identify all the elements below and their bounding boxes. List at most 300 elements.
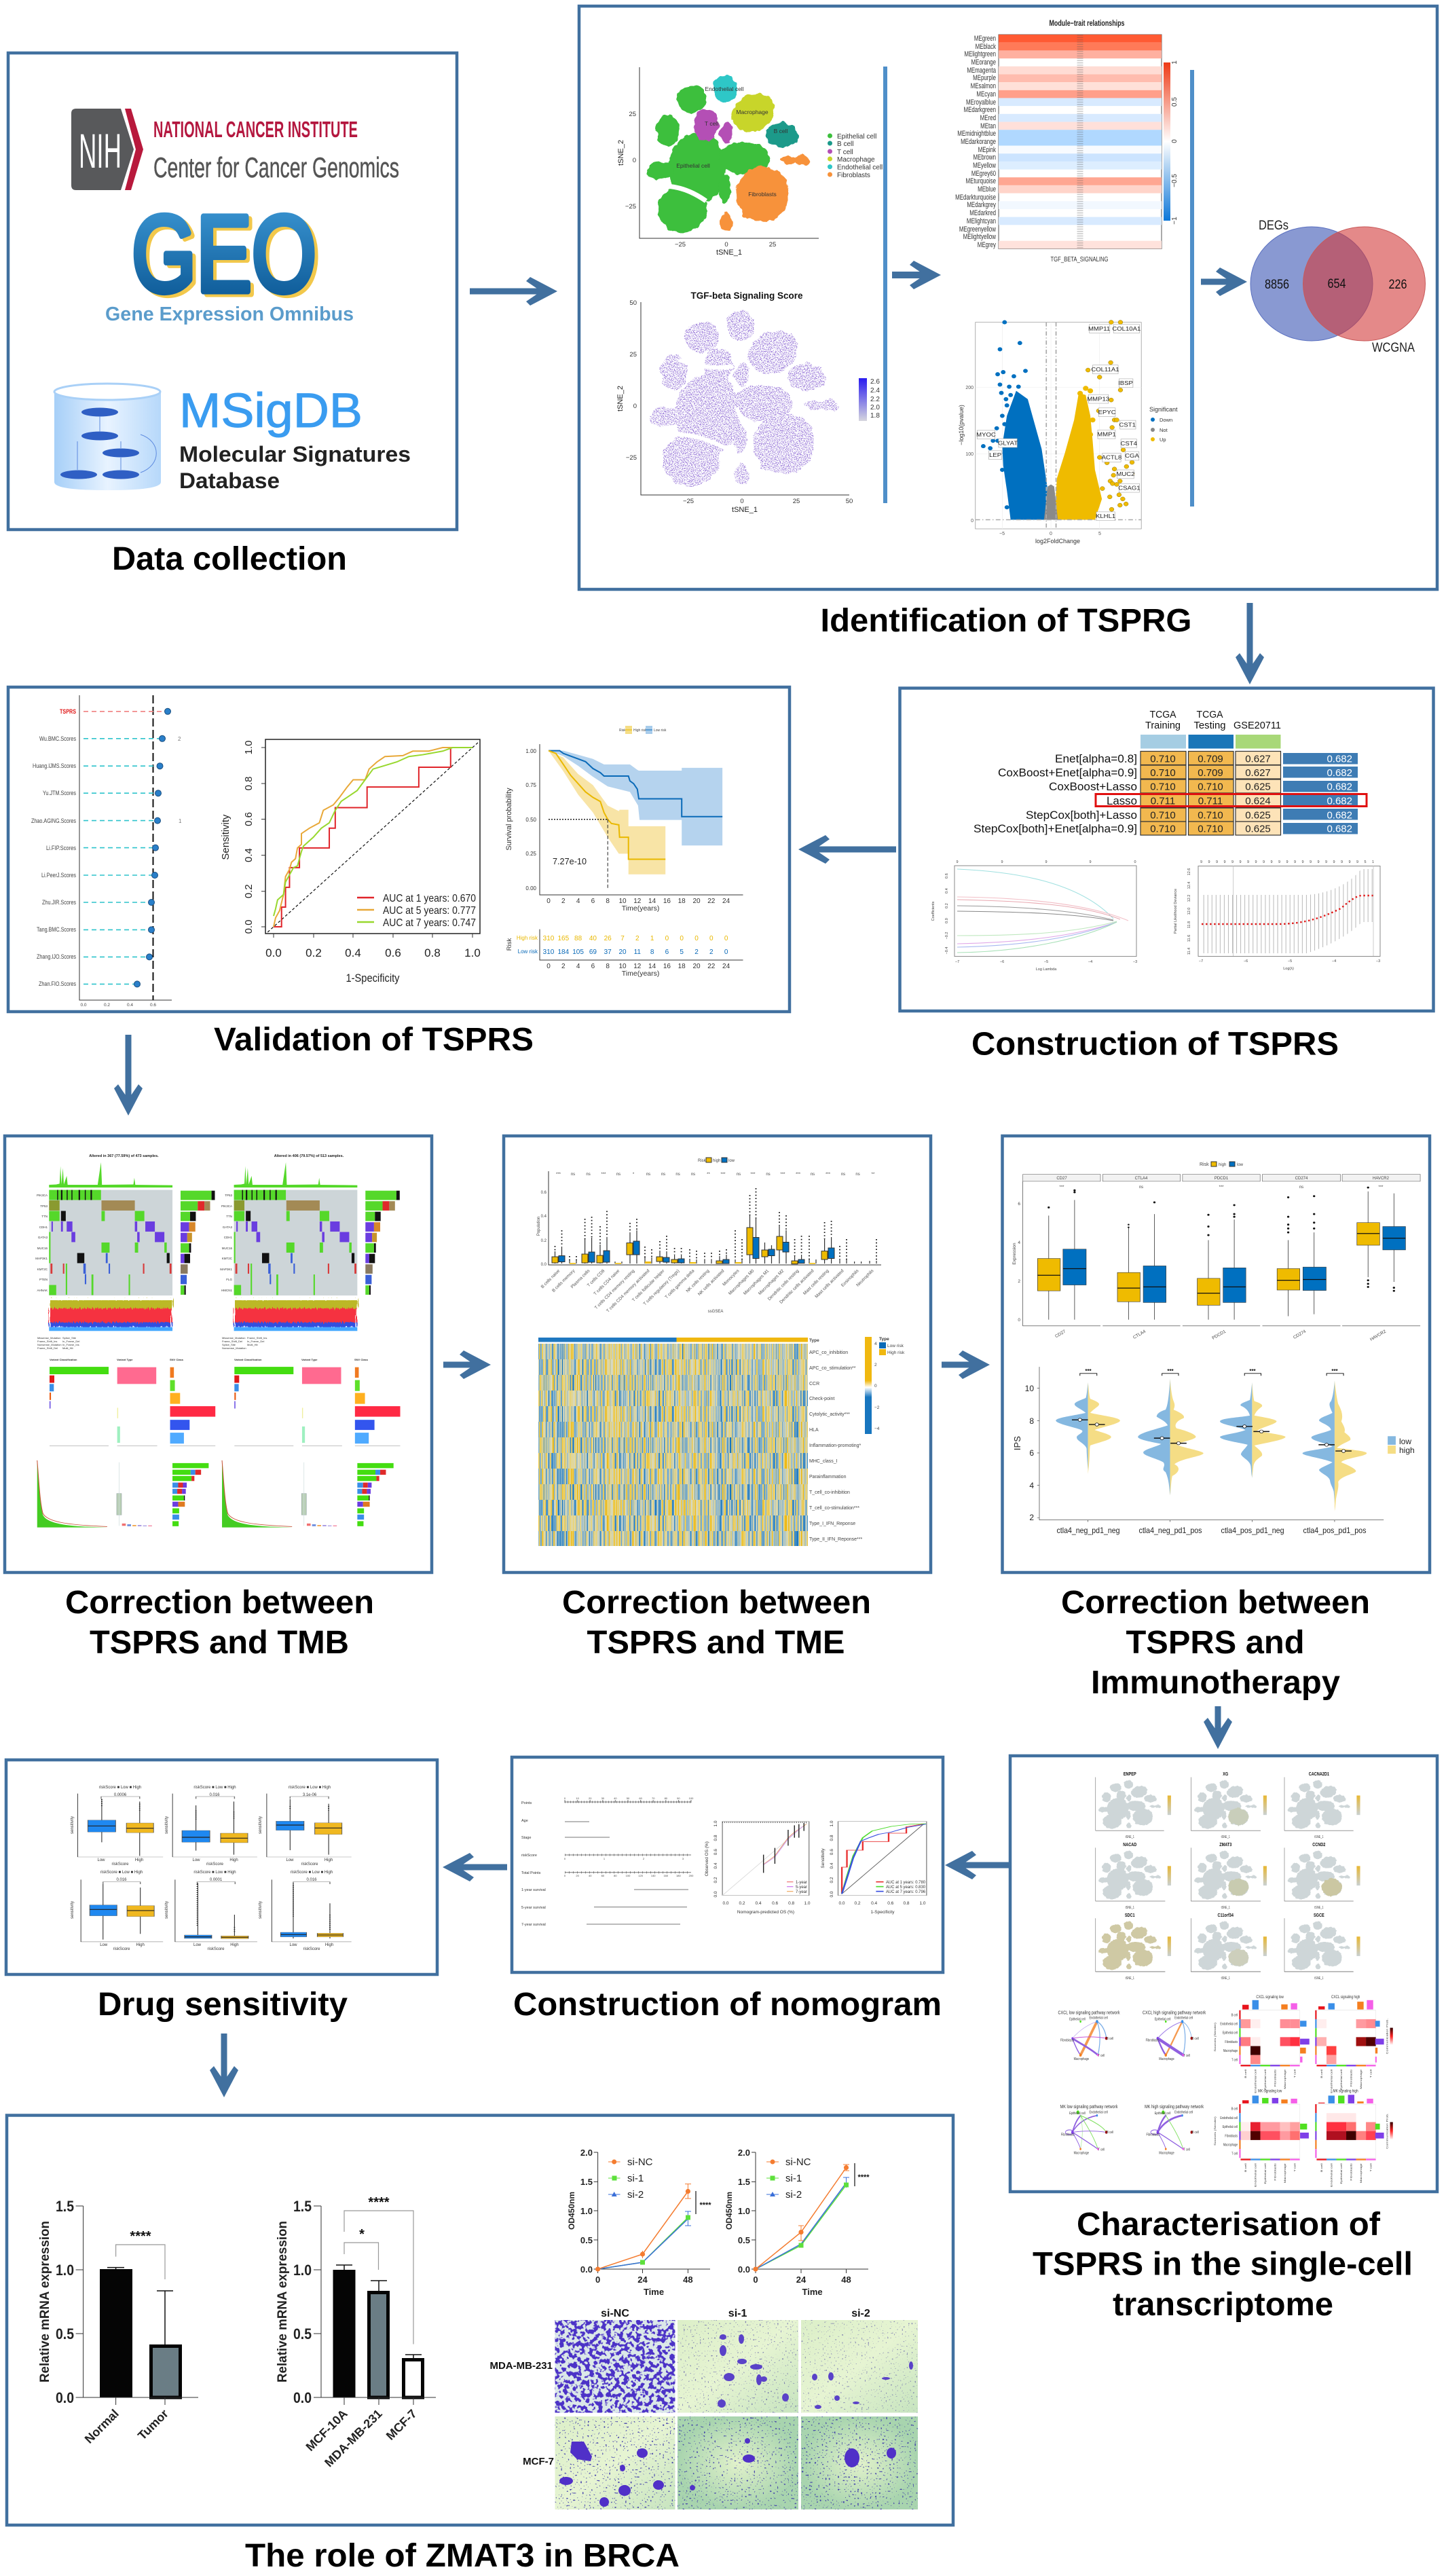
chart: communication probability heatmaps: Fibroblasts [1225,2134,1238,2137]
chart: immune cell boxplots: T cells CD4 naive [593,1268,621,1296]
chart: nomogram scales: 30 [601,1797,605,1800]
chart: nomogram scales: 5-year survival [521,1906,546,1910]
logo: GEO: Gene Expression Omnibus [105,303,354,325]
chart: nomogram ROC: 0.6 [887,1901,894,1906]
chart: CCK-8 line plot MCF-7: 2.0 [738,2148,750,2158]
table: model C-index: 0.710 [1198,823,1223,835]
chart: drug sensitivity boxplots: Low [286,1858,294,1862]
logo: GEO: GEO [132,193,316,314]
chart: immune cell boxplots: ns [855,1173,860,1177]
chart: C-index comparison lollipop: 0.0 [80,1003,87,1008]
heading: single-cell characterisation: TSPRS in the single-cell [1033,2246,1413,2283]
chart: nomogram scales: 40 [589,1874,592,1877]
chart: nomogram scales: 0 [564,1797,566,1800]
chart: lasso coefficient paths: 0 [1134,860,1136,864]
chart: gene expression tSNE grid: tSNE_1 [1221,1976,1230,1980]
chart: nomogram scales: Points [521,1801,532,1805]
chart: cell line mRNA bars: **** [368,2195,390,2210]
chart: Kaplan-Meier survival: 2 [561,963,566,970]
chart: immune cell boxplots: Dendritic cells resting [767,1268,800,1302]
chart: gene expression tSNE grid: tSNE_1 [1126,1835,1134,1839]
chart: nomogram scales: 10 [576,1797,580,1800]
chart: CXCL and MK communication networks: MK high signaling pathway network [1145,2104,1204,2110]
chart: module-trait heatmap [955,20,1179,263]
chart: immune checkpoint boxplots: 0 [1018,1318,1020,1323]
chart: immune function heatmap: APC_co_inhibition [809,1350,848,1355]
chart: lasso coefficient paths: 9 [1089,860,1092,864]
arrow: immunotherapy to single-cell [1204,1706,1232,1749]
chart: Kaplan-Meier survival: 20 [618,949,627,956]
chart: lasso coefficient paths: −0.2 [945,932,949,939]
table: model C-index: StepCox[both]+Enet[alpha=0.9] [974,822,1137,835]
heading: correction immunotherapy: Correction between [1061,1584,1370,1621]
chart: nomogram ROC: 0.2 [830,1877,834,1883]
chart: cross-validation deviance: −4 [1332,959,1336,963]
chart: time-dependent ROC: AUC at 7 years: 0.747 [383,917,476,929]
chart: cross-validation deviance: −6 [1244,959,1248,963]
logo: MSigDB: Molecular Signatures [179,442,411,466]
chart: immune function heatmap: Type [879,1337,889,1342]
chart: module-trait heatmap: MEmidnightblue [957,130,996,138]
chart: tSNE cell types: 0 [633,157,636,164]
chart: TGF-beta signaling score [616,291,880,514]
chart: Kaplan-Meier survival: 16 [663,898,671,905]
chart: volcano plot: Significant [1149,406,1178,413]
chart: nomogram ROC: 1.0 [830,1820,834,1827]
chart: CCK-8 line plot MDA-MB-231: **** [699,2201,711,2209]
chart: gene expression tSNE grid: tSNE_1 [1314,1976,1324,1980]
chart: nomogram scales: 50 [627,1797,630,1800]
chart: nomogram ROC: 0.4 [871,1901,877,1906]
chart: tSNE cell types: Macrophage [736,109,768,115]
chart: CXCL and MK communication networks: Macrophage [1159,2057,1174,2061]
chart: CXCL and MK communication networks: Macrophage [1074,2057,1089,2061]
chart: immune cell boxplots: 0.2 [541,1239,547,1243]
chart: C-index comparison lollipop: Zhao.AGING.Scores [31,817,76,824]
table: model C-index: 0.682 [1327,809,1352,822]
chart: nomogram scales: Stage [521,1836,531,1840]
chart: immune cell boxplots: Monocytes [722,1268,741,1287]
chart: volcano plot: CST1 [1119,422,1136,428]
chart: drug sensitivity boxplots: sensitivity [259,1816,263,1834]
chart: nomogram scales: 0 [564,1874,566,1877]
chart: immune checkpoint boxplots: HAVCR2 [1373,1177,1390,1181]
chart: immune function heatmap: Low risk [887,1344,904,1348]
chart: CCK-8 line plot MCF-7: 24 [796,2275,807,2285]
chart: communication probability heatmaps: Endothelial cell [1254,2163,1257,2187]
chart: IPS violin plots: *** [1249,1368,1257,1374]
chart: cell line mRNA bars: 1.5 [293,2198,312,2215]
heading: correction TMB: Correction between [65,1584,374,1621]
panel: role of ZMAT3 [7,2116,953,2525]
chart: nomogram scales: 7-year survival [521,1923,546,1927]
figure: transwell micrographs [489,2308,918,2509]
chart: nomogram ROC: 0.0 [838,1901,845,1906]
chart: tSNE cell types: −25 [675,241,686,249]
panel: identification of TSPRG [579,6,1437,589]
chart: module-trait heatmap: MEdarkgreen [963,106,996,114]
chart: oncoplots, mutation summaries and waterfall plots: Altered in 367 (77.59%) of 473 samples. [89,1154,159,1158]
chart: time-dependent ROC: 1.0 [464,946,481,959]
chart: TGF-beta signaling score: 50 [846,498,853,505]
chart: immune checkpoint boxplots: Expression [1012,1243,1017,1265]
chart: TGF-beta signaling score: 1.8 [870,412,880,420]
chart: lasso coefficient paths: −6 [1000,960,1004,964]
heading: correction immunotherapy: TSPRS and [1126,1624,1305,1661]
chart: immune cell boxplots: *** [556,1173,561,1177]
chart: communication probability heatmaps: MK signaling high [1333,2089,1358,2094]
chart: C-index comparison lollipop: 1 [179,818,182,824]
chart: immune cell boxplots: *** [796,1173,801,1177]
chart: CCK-8 line plot MCF-7: 0.0 [738,2264,750,2275]
chart: nomogram scales: 80 [614,1874,617,1877]
logo: NIH National Cancer Institute: Center for Cancer Genomics [153,151,399,183]
chart: Kaplan-Meier survival: 24 [722,898,730,905]
chart: immune function heatmap: 4 [874,1342,877,1346]
chart: volcano plot: −log10(pvalue) [958,405,965,445]
chart: immune cell boxplots: ns [766,1173,771,1177]
chart: CCK-8 line plot MDA-MB-231: si-1 [627,2173,644,2184]
chart: communication probability heatmaps: Sources (Sender) [1214,2116,1217,2146]
chart: immune cell boxplots: Mast cells activated [814,1268,845,1300]
chart: tSNE cell types [617,67,883,257]
chart: immune cell boxplots: ** [872,1173,875,1177]
chart: Kaplan-Meier survival: Low risk [654,729,667,733]
chart: nomogram ROC: AUC at 1 years: 0.780 [886,1881,926,1885]
chart: nomogram scales [521,1797,694,1927]
chart: nomogram scales: 70 [652,1797,655,1800]
chart: oncoplots, mutation summaries and waterfall plots: GATA3 [38,1236,48,1239]
chart: time-dependent ROC: 0.4 [243,848,255,862]
chart: oncoplots, mutation summaries and waterfall plots: Splice_Site [222,1343,236,1346]
chart: immune function heatmap: T_cell_co-stimulation*** [809,1506,859,1511]
chart: drug sensitivity boxplots: High [136,1943,145,1947]
chart: nomogram ROC: 0.6 [830,1849,834,1855]
chart: immune checkpoint boxplots: PDCD1 [1211,1329,1227,1341]
chart: module-trait heatmap: MEyellow [973,162,996,170]
chart: oncoplots, mutation summaries and waterfall plots: Multi_Hit [62,1346,73,1350]
chart: time-dependent ROC [220,739,481,985]
chart: nomogram scales: Age [521,1819,528,1823]
chart: gene expression tSNE grid: tSNE_1 [1126,1905,1134,1909]
chart: communication probability heatmaps: Communication Prob. [1386,2114,1389,2149]
chart: Kaplan-Meier survival: 0 [724,949,728,956]
panel: single-cell characterisation [1010,1756,1437,2192]
chart: volcano plot: CST4 [1121,440,1137,447]
table: model C-index: GSE20711 [1234,720,1281,731]
chart: drug sensitivity boxplots: riskScore [301,1862,318,1866]
chart: nomogram scales: 20 [589,1797,592,1800]
chart: module-trait heatmap: MElightyellow [963,233,996,241]
chart: immune cell boxplots: T cells follicular helper [631,1268,666,1303]
chart: immune checkpoint boxplots: HAVCR2 [1369,1329,1387,1342]
chart: oncoplots, mutation summaries and waterfall plots: Frame_Shift_Ins [247,1336,267,1340]
chart: immune function heatmap: Inflammation-promoting* [809,1443,861,1448]
heading: correction immunotherapy [1061,1584,1370,1701]
chart: IPS violin plots: *** [1167,1368,1174,1374]
chart: nomogram scales: 90 [677,1797,680,1800]
chart: immune function heatmap: MHC_class_I [809,1459,838,1464]
chart: communication probability heatmaps: B cell [1244,2069,1247,2078]
chart: Kaplan-Meier survival: 8 [606,963,610,970]
panel: drug sensitivity [6,1760,437,1974]
chart: gene expression tSNE grid: tSNE_1 [1221,1905,1230,1909]
chart: Kaplan-Meier survival: 12 [633,963,642,970]
chart: IPS violin plots: IPS [1012,1436,1022,1450]
chart: calibration curve: Nomogram-predicted OS (%) [737,1910,794,1915]
chart: calibration curve: 0.4 [755,1901,762,1906]
chart: time-dependent ROC: 0.2 [243,884,255,898]
chart: nomogram scales: 2 [643,1857,645,1860]
chart: lasso coefficient paths: −0.4 [945,947,949,954]
chart: CXCL and MK communication networks [1058,2010,1206,2156]
chart: immune checkpoint boxplots: *** [1219,1185,1224,1190]
chart: C-index comparison lollipop: Wu.BMC.Scores [39,735,76,742]
heading: drug sensitivity: Drug sensitivity [98,1986,348,2023]
heading: single-cell characterisation [1033,2206,1413,2323]
chart: drug sensitivity boxplots: Low [192,1858,200,1862]
chart: gene expression tSNE grid: tSNE_1 [1126,1976,1134,1980]
chart: drug sensitivity boxplots: High [135,1858,143,1862]
chart: nomogram ROC: AUC at 7 years: 0.796 [886,1890,926,1894]
chart: volcano plot: COL10A1 [1112,325,1141,332]
chart: drug sensitivity boxplots: riskScore [303,1947,320,1951]
chart: module-trait heatmap: −0.5 [1171,174,1179,187]
chart: Kaplan-Meier survival: 12 [633,898,642,905]
chart: communication probability heatmaps: CXCL signaling low [1256,1995,1284,2000]
chart: Kaplan-Meier survival: 0 [680,935,684,942]
chart: Kaplan-Meier survival: 4 [576,963,580,970]
chart: CXCL and MK communication networks: B cell [1192,2036,1199,2041]
chart: immune function heatmap: Cytolytic_activity*** [809,1412,850,1417]
chart: Kaplan-Meier survival: Survival probability [505,788,513,851]
chart: oncoplots, mutation summaries and waterfall plots: TTN [226,1215,232,1218]
chart: C-index comparison lollipop [31,695,182,1008]
table: model C-index: 0.711 [1198,796,1223,807]
chart: Kaplan-Meier survival: 6 [591,963,595,970]
chart: communication probability heatmaps: Epithelial cell [1340,2069,1343,2090]
chart: Kaplan-Meier survival: 0.00 [525,885,537,891]
chart: volcano plot: KLHL1 [1096,513,1115,519]
chart: CCK-8 line plot MCF-7: Time [802,2287,823,2297]
chart: nomogram ROC: 0.8 [903,1901,910,1906]
chart: cell line mRNA bars: MCF-10A [303,2407,350,2454]
chart: oncoplots, mutation summaries and waterfall plots: Variant Type [117,1358,133,1361]
chart: communication probability heatmaps: Epithelial cell [1264,2163,1267,2184]
chart: immune cell boxplots: *** [601,1173,606,1177]
table: model C-index: 0.627 [1245,767,1271,779]
chart: C-index comparison lollipop: 0.4 [127,1003,133,1008]
chart: CCK-8 line plot MDA-MB-231: OD450nm [567,2192,576,2230]
chart: communication probability heatmaps: T cell [1231,2152,1238,2156]
chart: immune cell boxplots: *** [780,1173,785,1177]
table: model C-index: Enet[alpha=0.8] [1055,752,1137,765]
chart: oncoplots, mutation summaries and waterfall plots: Missense_Mutation [37,1336,60,1340]
chart: gene expression tSNE grid: SGCE [1314,1913,1324,1918]
chart: Kaplan-Meier survival: 0 [546,898,551,905]
chart: immune cell boxplots: ** [707,1173,710,1177]
chart: nomogram ROC: 0.2 [854,1901,861,1906]
chart: tissue mRNA bars: 1.0 [56,2262,74,2279]
chart: Kaplan-Meier survival: 7.27e-10 [553,856,587,866]
chart: tissue mRNA bars [38,2198,198,2446]
chart: Venn diagram [1250,219,1426,355]
chart: cross-validation deviance: 12.6 [1187,868,1191,875]
chart: communication probability heatmaps: MK signaling low [1258,2089,1282,2094]
chart: nomogram ROC [821,1820,927,1915]
chart: cell line mRNA bars: 1.0 [293,2262,312,2279]
chart: tSNE cell types: T cell [705,120,718,127]
chart: tSNE cell types: tSNE_1 [716,249,742,257]
chart: drug sensitivity boxplots: riskScore ■ Low ■ High [291,1871,333,1875]
chart: immune cell boxplots: Eosinophils [840,1268,860,1288]
chart: drug sensitivity boxplots: riskScore ■ Low ■ High [99,1786,141,1790]
chart: immune function heatmap: Check-point [809,1397,834,1401]
chart: gene expression tSNE grid: C11orf34 [1218,1913,1234,1918]
chart: calibration curve: 1.0 [713,1820,718,1827]
chart: module-trait heatmap: MEblack [976,43,996,51]
chart: time-dependent ROC: 0.8 [424,946,441,959]
figure: transwell micrographs: MDA-MB-231 [489,2360,553,2372]
chart: cell line mRNA bars: 0.0 [293,2389,312,2406]
chart: cross-validation deviance: 12.4 [1187,882,1191,889]
chart: oncoplots, mutation summaries and waterfall plots: AHNAK [37,1289,48,1292]
chart: immune cell boxplots: low [728,1159,735,1163]
chart: IPS violin plots: ctla4_pos_pd1_neg [1221,1526,1284,1535]
chart: calibration curve: 0.0 [722,1901,729,1906]
heading: correction TME: TSPRS and TME [587,1624,845,1661]
chart: communication probability heatmaps: Fibroblasts [1274,2163,1276,2181]
chart: C-index comparison lollipop: Huang.IJMS.Scores [33,762,76,769]
chart: communication probability heatmaps: Endothelial cell [1330,2163,1333,2187]
chart: volcano plot: log2FoldChange [1035,538,1080,545]
chart: immune cell boxplots: ns [811,1173,815,1177]
chart: Kaplan-Meier survival: 0.25 [525,851,537,857]
chart: volcano plot: Not [1160,427,1168,433]
chart: IPS violin plots: *** [1331,1368,1339,1374]
chart: drug sensitivity boxplots: sensitivity [259,1901,263,1919]
chart: volcano plot: IBSP [1118,380,1133,386]
chart: nomogram scales: 3 [682,1857,684,1860]
chart: time-dependent ROC: 0.4 [345,946,361,959]
chart: volcano plot: EPYC [1098,409,1116,416]
chart: Kaplan-Meier survival: 2 [561,898,566,905]
chart: CXCL and MK communication networks: T cell [1098,2054,1105,2058]
chart: lasso coefficient paths: −5 [1044,960,1048,964]
table: model C-index: CoxBoost+Enet[alpha=0.9] [998,766,1137,779]
chart: IPS violin plots: ctla4_pos_pd1_pos [1303,1526,1366,1535]
chart: CCK-8 line plot MDA-MB-231: 2.0 [580,2148,593,2158]
chart: communication probability heatmaps: T cell [1369,2163,1372,2172]
chart: immune checkpoint boxplots: *** [1059,1185,1064,1190]
chart: tSNE cell types: 25 [769,241,776,249]
chart: communication probability heatmaps: B cell [1231,2107,1238,2111]
heading: data collection: Data collection [112,540,347,577]
chart: CXCL and MK communication networks: Endothelial cell [1174,2016,1193,2021]
arrow: single-cell to nomogram [945,1851,1010,1879]
chart: oncoplots, mutation summaries and waterfall plots: TP53 [225,1194,232,1197]
chart: TGF-beta signaling score: 25 [793,498,800,505]
chart: calibration curve: 0.8 [713,1835,718,1841]
arrow: WGCNA to Venn [1201,268,1247,296]
chart: module-trait heatmap: MEbrown [974,153,996,162]
chart: gene expression tSNE grid: NACAD [1123,1842,1136,1847]
chart: calibration curve: 0.6 [713,1849,718,1855]
chart: Kaplan-Meier survival: 18 [678,898,686,905]
chart: CXCL and MK communication networks: Fibroblasts [1147,2133,1160,2137]
chart: lasso coefficient paths: −3 [1133,960,1137,964]
chart: cross-validation deviance: −3 [1376,959,1380,963]
chart: immune checkpoint boxplots: CD274 [1293,1329,1307,1340]
chart: module-trait heatmap: MEdarkorange [961,138,996,146]
chart: nomogram scales: 100 [626,1874,631,1877]
chart: Kaplan-Meier survival: 18 [678,963,686,970]
chart: nomogram scales: 120 [638,1874,644,1877]
chart: IPS violin plots: 4 [1029,1481,1034,1490]
chart: immune cell boxplots: ns [691,1173,695,1177]
chart: CXCL and MK communication networks: T cell [1183,2148,1190,2152]
chart: immune cell boxplots: ns [661,1173,665,1177]
chart: drug sensitivity boxplots: 0.016 [209,1793,220,1797]
chart: IPS violin plots: high [1399,1446,1415,1455]
chart: volcano plot: 0 [1050,532,1052,536]
chart: drug sensitivity boxplots: riskScore ■ Low ■ High [289,1786,331,1790]
chart: oncoplots, mutation summaries and waterfall plots: Nonsense_Mutation [222,1346,246,1350]
chart: CXCL and MK communication networks: B cell [1107,2131,1113,2135]
chart: Kaplan-Meier survival: 8 [606,898,610,905]
chart: Kaplan-Meier survival: 0.75 [525,782,537,788]
chart: oncoplots, mutation summaries and waterfall plots: Multi_Hit [247,1343,258,1346]
arrow: tSNE to WGCNA [892,261,941,289]
chart: volcano plot: MUC2 [1116,471,1134,477]
chart: oncoplots, mutation summaries and waterfall plots: Frame_Shift_Del [222,1340,242,1343]
heading: single-cell characterisation: Characterisation of [1077,2206,1381,2243]
chart: Kaplan-Meier survival: 184 [557,949,570,956]
chart: Kaplan-Meier survival: Risk [619,729,626,733]
chart: nomogram scales: 80 [665,1797,668,1800]
chart: cross-validation deviance [1174,860,1380,971]
chart: immune function heatmap: High risk [887,1350,905,1355]
chart: communication probability heatmaps: Sources (Sender) [1214,2023,1217,2052]
chart: oncoplots, mutation summaries and waterfall plots: Altered in 406 (79.57%) of 513 samples. [274,1154,344,1158]
chart: Kaplan-Meier survival: 2 [709,949,713,956]
panel: nomogram [512,1757,943,1972]
chart: module-trait heatmap: MEgrey [978,241,996,249]
chart: gene expression tSNE grid: SDC1 [1125,1913,1135,1918]
chart: Kaplan-Meier survival: 6 [665,949,669,956]
chart: immune cell boxplots: ns [586,1173,591,1177]
chart: CCK-8 line plot MCF-7: OD450nm [724,2192,734,2230]
chart: Kaplan-Meier survival: 20 [692,963,701,970]
table: model C-index: 0.710 [1198,781,1223,793]
chart: module-trait heatmap: −1 [1171,217,1179,225]
heading: correction TMB: TSPRS and TMB [90,1624,349,1661]
chart: module-trait heatmap: MEdarkturquoise [955,194,996,202]
chart: cross-validation deviance: −7 [1199,959,1203,963]
chart: immune cell boxplots: ns [616,1173,620,1177]
chart: nomogram scales: 1 [604,1857,606,1860]
chart: module-trait heatmap: MEroyalblue [966,98,996,107]
chart: lasso coefficient paths: Coefficients [931,901,935,921]
heading: correction TME [562,1584,871,1661]
chart: nomogram scales: 1-year survival [521,1888,546,1892]
chart: drug sensitivity boxplots: sensitivity [71,1816,75,1834]
chart: communication probability heatmaps: T cell [1293,2163,1297,2172]
table: model C-index: 0.710 [1150,823,1176,835]
chart: calibration curve: Observed OS (%) [705,1841,709,1876]
chart: TGF-beta signaling score: −25 [683,498,694,505]
chart: calibration curve: 1.0 [804,1901,811,1906]
